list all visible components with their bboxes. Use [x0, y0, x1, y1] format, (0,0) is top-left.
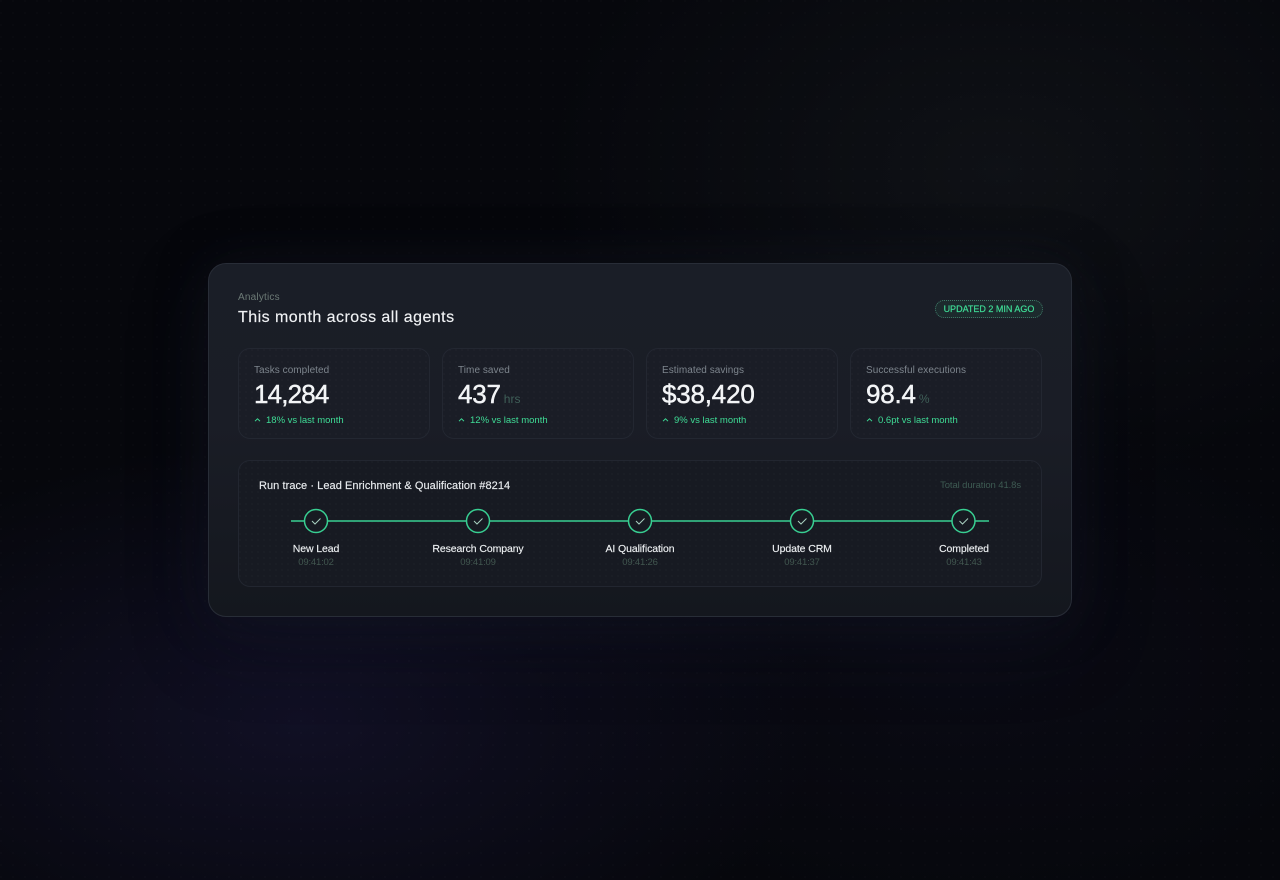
label: Time saved — [458, 365, 510, 376]
step label: Completed: Completed — [939, 543, 989, 555]
trace title: Run trace · Lead Enrichment & Qualification #8214 — [259, 480, 510, 492]
step label: AI Qualification: AI Qualification — [605, 543, 675, 555]
panel: time saved — [442, 348, 634, 439]
panel: tasks completed — [238, 348, 430, 439]
panel: successful executions — [850, 348, 1042, 439]
value: $38,420 — [662, 379, 755, 409]
step node: New Lead — [304, 510, 328, 532]
panel: estimated savings — [646, 348, 838, 439]
step node: Research Company — [466, 510, 490, 532]
change: 0.6pt vs last month — [878, 415, 958, 426]
step label: New Lead: New Lead — [293, 543, 339, 555]
timeline — [291, 508, 989, 534]
step time: Completed: 09:41:43 — [946, 557, 982, 568]
panel: run trace — [238, 460, 1042, 587]
icon: up chevron — [254, 418, 260, 422]
value: 14,284 — [254, 379, 328, 409]
step node: Completed — [952, 510, 975, 532]
step label: Research Company: Research Company — [432, 543, 524, 555]
change: 12% vs last month — [470, 415, 548, 426]
value: 437hrs — [458, 379, 520, 409]
step time: Update CRM: 09:41:37 — [784, 557, 820, 568]
step time: AI Qualification: 09:41:26 — [622, 557, 658, 568]
heading: This month across all agents — [238, 309, 455, 326]
label: Tasks completed — [254, 365, 329, 376]
change: 9% vs last month — [674, 415, 746, 426]
step time: New Lead: 09:41:02 — [298, 557, 334, 568]
step label: Update CRM: Update CRM — [772, 543, 832, 555]
change: 18% vs last month — [266, 415, 344, 426]
eyebrow: analytics: Analytics — [238, 292, 280, 303]
connector line — [291, 520, 989, 522]
label: Successful executions — [866, 365, 966, 376]
icon: up chevron — [662, 418, 668, 422]
panel: analytics card — [208, 263, 1072, 617]
total duration: Total duration 41.8s — [940, 480, 1021, 491]
status badge — [935, 300, 1043, 318]
status badge: UPDATED 2 MIN AGO — [944, 304, 1034, 314]
step node: Update CRM — [790, 510, 814, 532]
icon: up chevron — [458, 418, 464, 422]
label: Estimated savings — [662, 365, 744, 376]
step node: AI Qualification — [628, 510, 652, 532]
value: 98.4% — [866, 379, 929, 409]
step time: Research Company: 09:41:09 — [460, 557, 496, 568]
icon: up chevron — [866, 418, 872, 422]
